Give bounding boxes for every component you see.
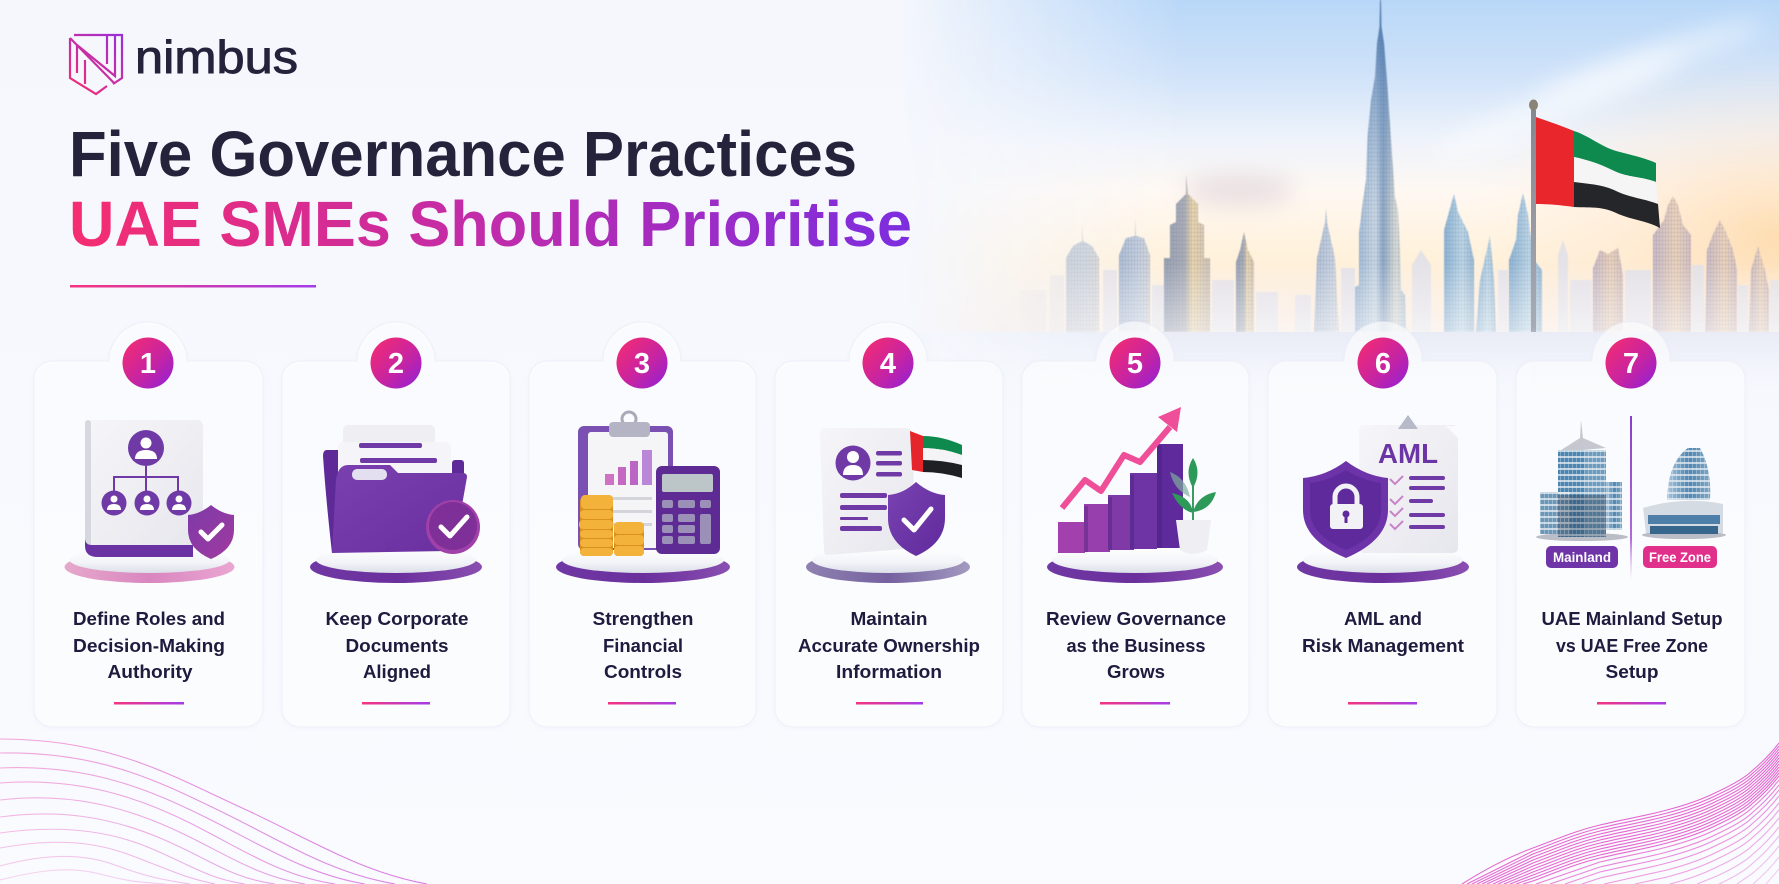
icon: mainland building xyxy=(1536,420,1628,541)
number badge 4: 4 xyxy=(880,348,896,380)
icon: clipboard, coins and calculator xyxy=(556,412,730,583)
wordmark: nimbus xyxy=(135,31,298,83)
icon: AML checklist with lock shield: AML xyxy=(1378,438,1438,469)
fog band under skyline xyxy=(1080,332,1779,361)
icon: org chart with shield xyxy=(64,420,234,583)
number badge 5 xyxy=(1110,338,1160,388)
flagpole xyxy=(1529,100,1538,400)
label xyxy=(1302,609,1464,656)
label: Risk Management xyxy=(1302,636,1464,656)
label xyxy=(326,609,468,682)
panel: card 6 AML and risk xyxy=(1268,322,1497,727)
label: as the Business xyxy=(1066,636,1206,656)
label xyxy=(592,609,694,682)
icon: bar chart with rising arrow and plant xyxy=(1047,407,1223,583)
decorative wave lines: bottom right xyxy=(1462,743,1779,884)
number badge 3: 3 xyxy=(634,348,650,380)
badge: Free Zone: Free Zone xyxy=(1649,549,1711,565)
badge: Mainland xyxy=(1546,546,1618,568)
label: Information xyxy=(836,662,942,682)
label: Strengthen xyxy=(592,609,694,629)
hero photo: Dubai skyline with UAE flag xyxy=(938,0,1779,354)
icon: vertical divider xyxy=(1630,416,1632,580)
label: Grows xyxy=(1107,662,1165,682)
label: UAE Mainland Setup xyxy=(1542,609,1722,629)
UAE flag xyxy=(1536,117,1660,228)
number badge 4 xyxy=(862,338,914,388)
panel: card 4 ownership information xyxy=(775,322,1003,727)
icon: free zone building xyxy=(1642,448,1726,539)
label: Controls xyxy=(604,662,682,682)
panel: card 2 corporate documents xyxy=(282,322,510,727)
label: vs UAE Free Zone xyxy=(1556,636,1708,656)
panel: card 7 mainland vs free zone xyxy=(1516,322,1745,727)
label: Financial xyxy=(603,636,683,656)
badge: Mainland: Mainland xyxy=(1553,549,1611,565)
panel: card 3 financial controls xyxy=(529,322,756,727)
title: Five Governance Practices xyxy=(69,118,857,190)
label xyxy=(1542,609,1722,682)
label: Keep Corporate xyxy=(326,609,468,629)
number badge 6: 6 xyxy=(1375,348,1391,380)
panel: card 1 define roles xyxy=(34,322,263,727)
number badge 2: 2 xyxy=(388,348,404,380)
label xyxy=(73,609,225,682)
number badge 6 xyxy=(1358,338,1408,388)
label: Accurate Ownership xyxy=(798,636,980,656)
logo: nimbus xyxy=(70,31,298,94)
number badge 5: 5 xyxy=(1127,348,1143,380)
label: Setup xyxy=(1606,662,1658,682)
label: Decision-Making xyxy=(73,636,225,656)
icon: folder with documents xyxy=(310,425,482,583)
number badge 1: 1 xyxy=(140,348,156,380)
label: Authority xyxy=(108,662,192,682)
icon: ownership document, flag and shield xyxy=(806,428,970,583)
title underline xyxy=(70,285,316,288)
label: Review Governance xyxy=(1046,609,1226,629)
icon: nimbus shield xyxy=(70,35,122,94)
decorative wave lines: bottom left xyxy=(0,739,427,884)
label xyxy=(1046,609,1226,682)
label xyxy=(798,609,980,682)
title xyxy=(69,118,912,260)
number badge 7 xyxy=(1606,338,1656,388)
badge: Free Zone xyxy=(1643,546,1717,568)
panel: card 5 governance growth xyxy=(1022,322,1249,727)
label: Define Roles and xyxy=(73,609,225,629)
number badge 1 xyxy=(122,338,174,388)
number badge 3 xyxy=(616,338,668,388)
label: Aligned xyxy=(363,662,431,682)
number badge 2 xyxy=(370,338,422,388)
title: UAE SMEs Should Prioritise xyxy=(69,188,912,260)
icon: AML checklist with lock shield xyxy=(1297,415,1469,583)
label: Documents xyxy=(346,636,448,656)
label: AML and xyxy=(1344,609,1422,629)
label: Maintain xyxy=(850,609,928,629)
number badge 7: 7 xyxy=(1623,348,1639,380)
